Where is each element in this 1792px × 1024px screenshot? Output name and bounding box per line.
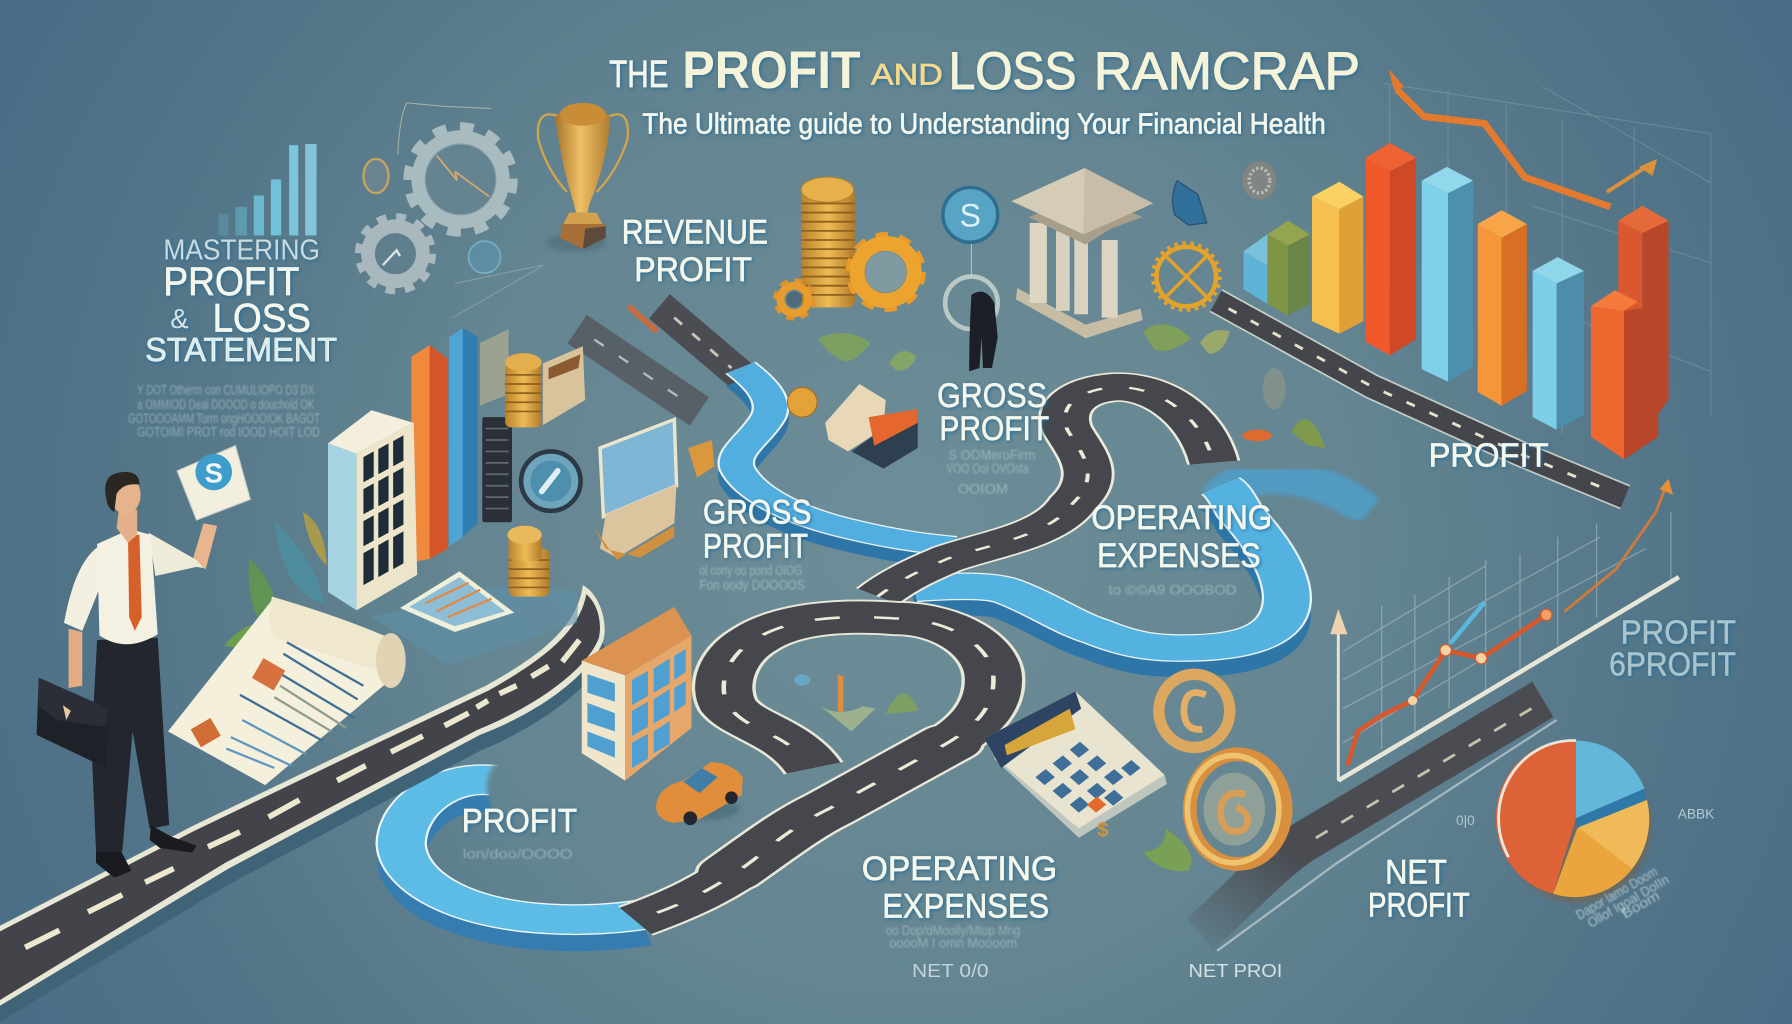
icon: person with briefcase and paper: S bbox=[205, 457, 223, 488]
icon: central bars and building bbox=[328, 328, 478, 610]
label: revenue profit: REVENUE bbox=[622, 213, 768, 251]
bar: red bbox=[1366, 143, 1416, 355]
text block: pie small print: Dapor lamo Doom bbox=[1573, 864, 1660, 923]
bar: orange bbox=[1478, 210, 1527, 406]
text block: operating expenses bottom small print: ooooM I omn Moooom bbox=[889, 935, 1017, 950]
label: profit and profit: 6PROFIT bbox=[1609, 646, 1736, 683]
grid: line chart grid bbox=[1343, 512, 1671, 749]
chart: rising line chart bbox=[1330, 479, 1679, 781]
label: net profit: PROFIT bbox=[1368, 887, 1470, 925]
label: operating expenses bottom bbox=[862, 850, 1057, 926]
grid: faint chart grid bbox=[1384, 83, 1711, 434]
title: AND bbox=[871, 59, 943, 92]
label: gross profit right: PROFIT bbox=[939, 410, 1049, 448]
icon: scroll document bbox=[168, 597, 406, 785]
icon: orange car bbox=[656, 762, 743, 825]
icon: coins, safe, dark panel and screen bbox=[480, 329, 918, 560]
title: PROFIT bbox=[682, 41, 861, 100]
text block: gross profit small print bbox=[699, 563, 805, 593]
icon: office tower bbox=[328, 410, 417, 610]
chart: pie bbox=[1456, 740, 1714, 903]
icon: person with briefcase and paper bbox=[37, 446, 250, 878]
text block: small print: GOTOOOAMM Torm ongHOOOIOK BAGOT bbox=[128, 411, 320, 426]
bar: olive bbox=[1267, 221, 1310, 315]
road: lower loop bbox=[635, 617, 993, 921]
title: LOSS bbox=[949, 42, 1077, 101]
road: upper right straight bbox=[1216, 301, 1625, 497]
icon: gears bbox=[359, 103, 544, 318]
panel: mastering profit and loss statement bbox=[128, 144, 337, 440]
label: net profit: NET bbox=[1385, 853, 1447, 891]
text block: gross profit right small print: OOIOM bbox=[958, 482, 1008, 497]
text block: gross profit right small print: VOO Ool OVOsta bbox=[946, 461, 1029, 476]
title: RAMCRAP bbox=[1094, 42, 1360, 101]
icon: mat with chart card and coins bbox=[371, 526, 578, 665]
heading: mastering: PROFIT bbox=[163, 260, 299, 304]
arrow: orange trend bbox=[1390, 71, 1657, 207]
text block: small print bbox=[128, 382, 320, 440]
icon: gold rings bbox=[1143, 674, 1286, 871]
text block: gross profit small print: ol cony oo pond OIOG bbox=[699, 563, 802, 578]
label: gross profit right bbox=[937, 377, 1049, 448]
icon: trophy bbox=[538, 103, 628, 251]
label: gross profit left: PROFIT bbox=[703, 528, 808, 566]
heading: mastering: STATEMENT bbox=[145, 332, 337, 369]
text block: gross profit small print: Fon oody DOOOOS bbox=[699, 578, 805, 593]
icon: coin stack with gears bbox=[778, 177, 920, 315]
icon: gold wheel bbox=[1153, 243, 1219, 310]
road: blue U curve bbox=[401, 761, 646, 937]
caption: net 0/0: NET 0/0 bbox=[912, 960, 989, 981]
label: net profit bbox=[1368, 853, 1470, 925]
icon: calculator bbox=[984, 691, 1167, 842]
bar: blue bbox=[1533, 257, 1584, 430]
text block: gross profit right small print: S OOMeroFirm bbox=[949, 447, 1035, 462]
icon: S badge with figure: S bbox=[960, 197, 981, 233]
road: blue lower-right ribbon bbox=[914, 477, 1369, 664]
icon: leaves bbox=[224, 512, 327, 648]
icon: mini bar chart bbox=[218, 144, 317, 235]
trend line bbox=[1347, 479, 1673, 766]
label: operating expenses bottom: EXPENSES bbox=[882, 888, 1049, 926]
label: gross profit left: GROSS bbox=[703, 493, 811, 531]
text block: pie small print: Boom bbox=[1619, 888, 1662, 921]
icon: small plants and tokens bbox=[818, 324, 1326, 448]
road: main foreground bbox=[0, 585, 608, 1022]
bar: sky blue bbox=[1422, 167, 1473, 382]
icon: calculator: $ bbox=[1097, 819, 1109, 842]
bar: light blue bbox=[1243, 234, 1271, 304]
road: upper left fragments bbox=[577, 306, 743, 411]
chart: pie: ABBK bbox=[1678, 806, 1714, 821]
label: operating expenses centre: EXPENSES bbox=[1097, 537, 1261, 575]
text block: gross profit right small print bbox=[946, 447, 1035, 497]
text block: small print: Y DOT Otherm con CUMULIOPO D3 DX bbox=[137, 382, 314, 397]
text block: operating expenses small print: to ©©A9 OOOBOD bbox=[1109, 582, 1237, 597]
label: revenue profit bbox=[622, 213, 768, 289]
text block: small print: GOTOIMI PROT rod IOOD HOIT LOD bbox=[137, 425, 320, 440]
text block: pie small print: Ollof Igoal DoIIn bbox=[1585, 872, 1672, 931]
chart: pie: 0|0 bbox=[1456, 813, 1475, 828]
title bbox=[609, 41, 1360, 101]
bar: yellow bbox=[1312, 182, 1363, 334]
label: profit and profit: PROFIT bbox=[1621, 614, 1736, 651]
bar: orange column bbox=[411, 345, 448, 562]
bar: rear red bbox=[1618, 206, 1669, 434]
heading: mastering bbox=[145, 234, 337, 369]
icon: apartment building bbox=[582, 607, 691, 781]
icon: bank building bbox=[1011, 168, 1207, 338]
caption: net prof: NET PROI bbox=[1189, 960, 1282, 981]
icon: small plants in loop bbox=[794, 674, 919, 731]
heading: mastering: LOSS bbox=[213, 296, 311, 340]
text block: operating expenses bottom small print bbox=[886, 923, 1021, 950]
chart: 3D bar chart with trend arrow bbox=[1243, 71, 1711, 459]
road: curvy dark upper bbox=[878, 387, 1214, 597]
label: operating expenses centre: OPERATING bbox=[1091, 499, 1272, 537]
label: gross profit left bbox=[703, 493, 811, 566]
label: operating expenses bottom: OPERATING bbox=[862, 850, 1057, 888]
icon: speckled badge bbox=[1242, 161, 1277, 200]
text block: small print: a OMMIOD Deal DOOOD o douchold OK bbox=[137, 397, 314, 412]
bar: blue column bbox=[449, 328, 478, 546]
label: operating expenses centre bbox=[1091, 499, 1272, 575]
subtitle: The Ultimate guide to Understanding Your Financial Health bbox=[642, 109, 1326, 141]
label: gross profit right: GROSS bbox=[937, 377, 1047, 415]
axes bbox=[1330, 577, 1679, 781]
road: blue upper ribbon bbox=[736, 368, 954, 559]
label: profit: PROFIT bbox=[1429, 437, 1549, 474]
title: THE bbox=[609, 53, 669, 95]
bar: front orange bbox=[1591, 290, 1658, 459]
label: revenue profit: PROFIT bbox=[634, 251, 752, 289]
heading: mastering: & bbox=[170, 303, 189, 334]
label: profit and profit bbox=[1609, 614, 1736, 683]
heading: mastering: MASTERING bbox=[163, 234, 320, 266]
icon: S badge with figure bbox=[943, 187, 998, 371]
text block: operating expenses bottom small print: oo Dop/dMoolly/Mtop Mng bbox=[886, 923, 1021, 938]
text block: profit small print: lon/doo/OOOO bbox=[463, 846, 573, 861]
label: profit U curve: PROFIT bbox=[462, 803, 577, 840]
road: lower right fading bbox=[1200, 699, 1557, 951]
